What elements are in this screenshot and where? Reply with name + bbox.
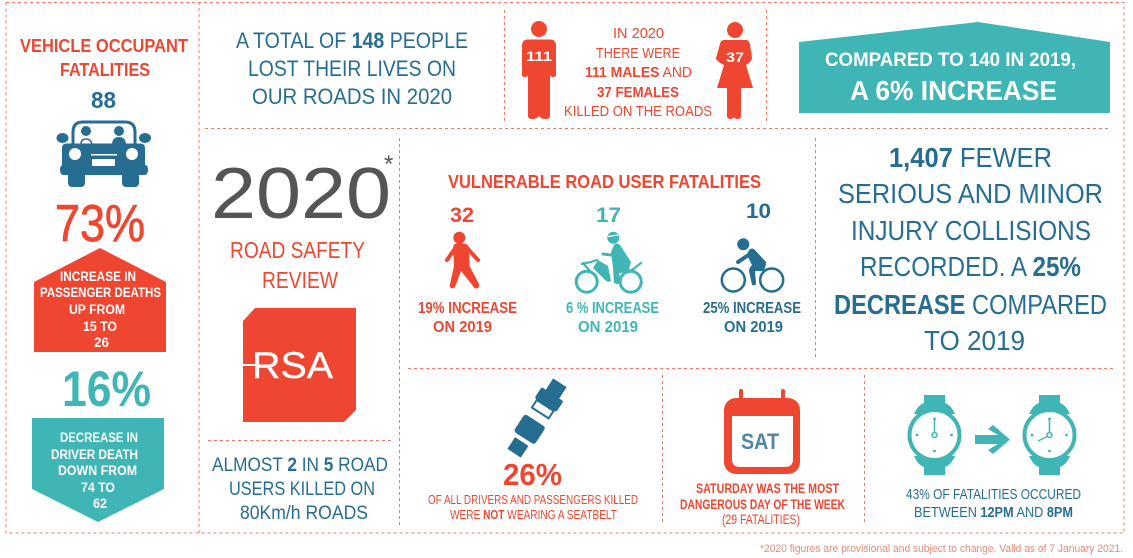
title: 2020 road safety review: 2020 xyxy=(211,154,391,234)
text block: time of day caption: 43% OF FATALITIES OCCURED xyxy=(906,486,1081,503)
stat: motorcyclists: ON 2019 xyxy=(578,319,638,336)
stat: 26%: 26% xyxy=(503,457,562,492)
callout: driver deaths decrease: 74 TO xyxy=(81,480,115,495)
heading: vulnerable road user fatalities: VULNERABLE ROAD USER FATALITIES xyxy=(448,171,761,192)
text block: fewer injury collisions: DECREASE COMPARED xyxy=(834,289,1107,320)
icon: male figure 111: 111 xyxy=(526,48,552,64)
text block: gender split: IN 2020 xyxy=(613,25,664,42)
text block: total lives lost: OUR ROADS IN 2020 xyxy=(252,84,452,109)
text block: fewer injury collisions: 1,407 FEWER xyxy=(889,142,1052,173)
panel: vulnerable road users xyxy=(418,171,801,336)
callout: driver deaths decrease xyxy=(32,418,164,522)
stat: pedestrians: ON 2019 xyxy=(433,319,492,336)
stat: pedestrians xyxy=(418,203,517,336)
stat: cyclists: ON 2019 xyxy=(724,319,783,336)
title: 2020 road safety review xyxy=(211,151,393,293)
icon: arrow xyxy=(975,425,1010,454)
text block: total lives lost xyxy=(236,28,468,109)
text block: fewer injury collisions: TO 2019 xyxy=(924,325,1025,356)
panel: time of day xyxy=(906,395,1081,521)
callout: compared to 2019: COMPARED TO 140 IN 2019, xyxy=(825,49,1076,71)
text block: time of day caption: BETWEEN 12PM AND 8PM xyxy=(914,504,1073,521)
logo: RSA: RSA xyxy=(252,345,333,386)
text block: gender split: THERE WERE xyxy=(596,45,680,62)
callout: driver deaths decrease: DECREASE IN xyxy=(60,430,138,445)
text block: total lives lost: A TOTAL OF 148 PEOPLE xyxy=(236,28,468,53)
callout: passenger deaths increase: 26 xyxy=(94,335,109,350)
icon: female figure 37: 37 xyxy=(726,49,744,65)
title: 2020 road safety review: REVIEW xyxy=(262,267,339,293)
text block: 80km/h roads: USERS KILLED ON xyxy=(229,478,375,500)
text block: 80km/h roads: ALMOST 2 IN 5 ROAD xyxy=(212,454,388,476)
callout: compared to 2019: A 6% INCREASE xyxy=(850,75,1057,106)
panel: seatbelt xyxy=(428,376,638,522)
text block: total lives lost: LOST THEIR LIVES ON xyxy=(248,56,456,81)
text block: seatbelt caption: OF ALL DRIVERS AND PASSENGERS KILLED xyxy=(428,492,638,507)
icon: female figure 37 xyxy=(716,22,753,119)
panel: saturday xyxy=(680,389,845,527)
callout: passenger deaths increase xyxy=(34,248,166,352)
number: 88: 88 xyxy=(91,87,116,113)
heading: vehicle occupant fatalities: FATALITIES xyxy=(60,59,150,80)
text block: time of day caption xyxy=(906,486,1081,521)
stat: 73%: 73% xyxy=(55,195,145,253)
stat: pedestrians: 32 xyxy=(450,203,474,227)
callout: driver deaths decrease: DRIVER DEATH xyxy=(51,447,138,462)
text block: saturday caption: SATURDAY WAS THE MOST xyxy=(696,481,840,496)
stat: 16%: 16% xyxy=(62,361,151,417)
callout: compared to 2019 xyxy=(799,22,1110,113)
logo: RSA xyxy=(243,308,356,422)
text block: fewer injury collisions: SERIOUS AND MINOR xyxy=(838,178,1103,209)
text block: seatbelt caption xyxy=(428,492,638,522)
text block: saturday caption: DANGEROUS DAY OF THE WEEK xyxy=(680,497,845,512)
stat: motorcyclists: 17 xyxy=(596,203,621,227)
title: 2020 road safety review: * xyxy=(384,151,393,178)
text block: fewer injury collisions: RECORDED. A 25% xyxy=(860,251,1081,282)
stat: pedestrians: 19% INCREASE xyxy=(418,300,517,317)
text block: gender split xyxy=(564,25,712,120)
stat: motorcyclists xyxy=(566,203,659,336)
callout: passenger deaths increase: INCREASE IN xyxy=(60,269,136,284)
icon: watch at 8 xyxy=(1024,395,1074,475)
text block: saturday caption: (29 FATALITIES) xyxy=(722,512,800,527)
callout: driver deaths decrease: DOWN FROM xyxy=(58,463,137,478)
title: 2020 road safety review: ROAD SAFETY xyxy=(230,237,365,263)
icon: calendar xyxy=(724,389,800,474)
callout: passenger deaths increase: PASSENGER DEATHS xyxy=(40,285,161,300)
icon: calendar: SAT xyxy=(741,429,779,454)
stat: cyclists xyxy=(703,199,801,336)
icon: seatbelt xyxy=(503,376,571,460)
stat: cyclists: 10 xyxy=(746,199,771,223)
panel: male and female fatalities xyxy=(522,21,753,120)
text block: seatbelt caption: WERE NOT WEARING A SEATBELT xyxy=(450,507,617,522)
heading: vehicle occupant fatalities: VEHICLE OCCUPANT xyxy=(20,35,189,56)
text block: gender split: 37 FEMALES xyxy=(597,84,679,101)
stat: motorcyclists: 6 % INCREASE xyxy=(566,300,659,317)
icon: watch at 12 xyxy=(910,395,960,475)
callout: driver deaths decrease: 62 xyxy=(93,496,107,511)
callout: passenger deaths increase: 15 TO xyxy=(83,319,117,334)
icon: car with occupants xyxy=(56,122,151,187)
text block: gender split: KILLED ON THE ROADS xyxy=(564,103,712,120)
icon: male figure 111 xyxy=(522,21,556,119)
text block: gender split: 111 MALES AND xyxy=(585,64,692,81)
panel: vehicle occupant fatalities xyxy=(20,35,189,522)
text block: 80km/h roads: 80Km/h ROADS xyxy=(240,502,368,524)
text block: fewer injury collisions: INJURY COLLISIONS xyxy=(851,215,1091,246)
stat: cyclists: 25% INCREASE xyxy=(703,300,801,317)
text block: 80km/h roads xyxy=(212,454,388,524)
text block: saturday caption xyxy=(680,481,845,527)
heading: vehicle occupant fatalities xyxy=(20,35,189,80)
callout: passenger deaths increase: UP FROM xyxy=(69,302,125,317)
text block: fewer injury collisions xyxy=(834,142,1107,356)
